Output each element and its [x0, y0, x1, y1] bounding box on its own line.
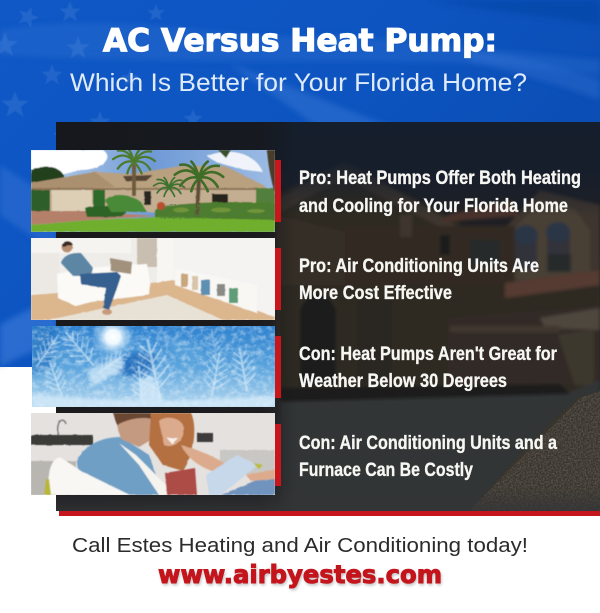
photo: man relaxing on a sofa: [31, 238, 275, 320]
text: con heat pumps: Weather Below 30 Degrees: [299, 370, 507, 392]
text: pro air conditioning: Pro: Air Conditioning Units Are: [299, 255, 539, 277]
photo: couple reading a document: [31, 413, 275, 495]
text: pro air conditioning: More Cost Effective: [299, 282, 452, 304]
red accent bar 2: [275, 248, 281, 310]
photo: Florida house: [31, 150, 275, 232]
website url: www.airbyestes.com: [158, 560, 442, 589]
panel: dark house photo: [56, 122, 600, 511]
call to action: Call Estes Heating and Air Conditioning today!: [72, 535, 528, 557]
text: pro air conditioning: [299, 255, 539, 304]
text: pro heat pumps: [299, 167, 581, 217]
red accent bar 1: [275, 160, 281, 222]
red accent bar 3: [275, 336, 281, 398]
text: con heat pumps: [299, 343, 557, 392]
title: AC Versus Heat Pump:: [103, 23, 497, 59]
red accent bar 4: [275, 424, 281, 486]
website url: www.airbyestes.com: [159, 562, 443, 591]
subtitle: Which Is Better for Your Florida Home?: [70, 69, 527, 97]
text: con air conditioning: Furnace Can Be Costly: [299, 459, 473, 481]
text: con air conditioning: [299, 432, 557, 481]
panel: red underline: [59, 511, 600, 516]
photo: frosted window: [32, 326, 275, 407]
background: blue flag banner: [0, 0, 600, 367]
